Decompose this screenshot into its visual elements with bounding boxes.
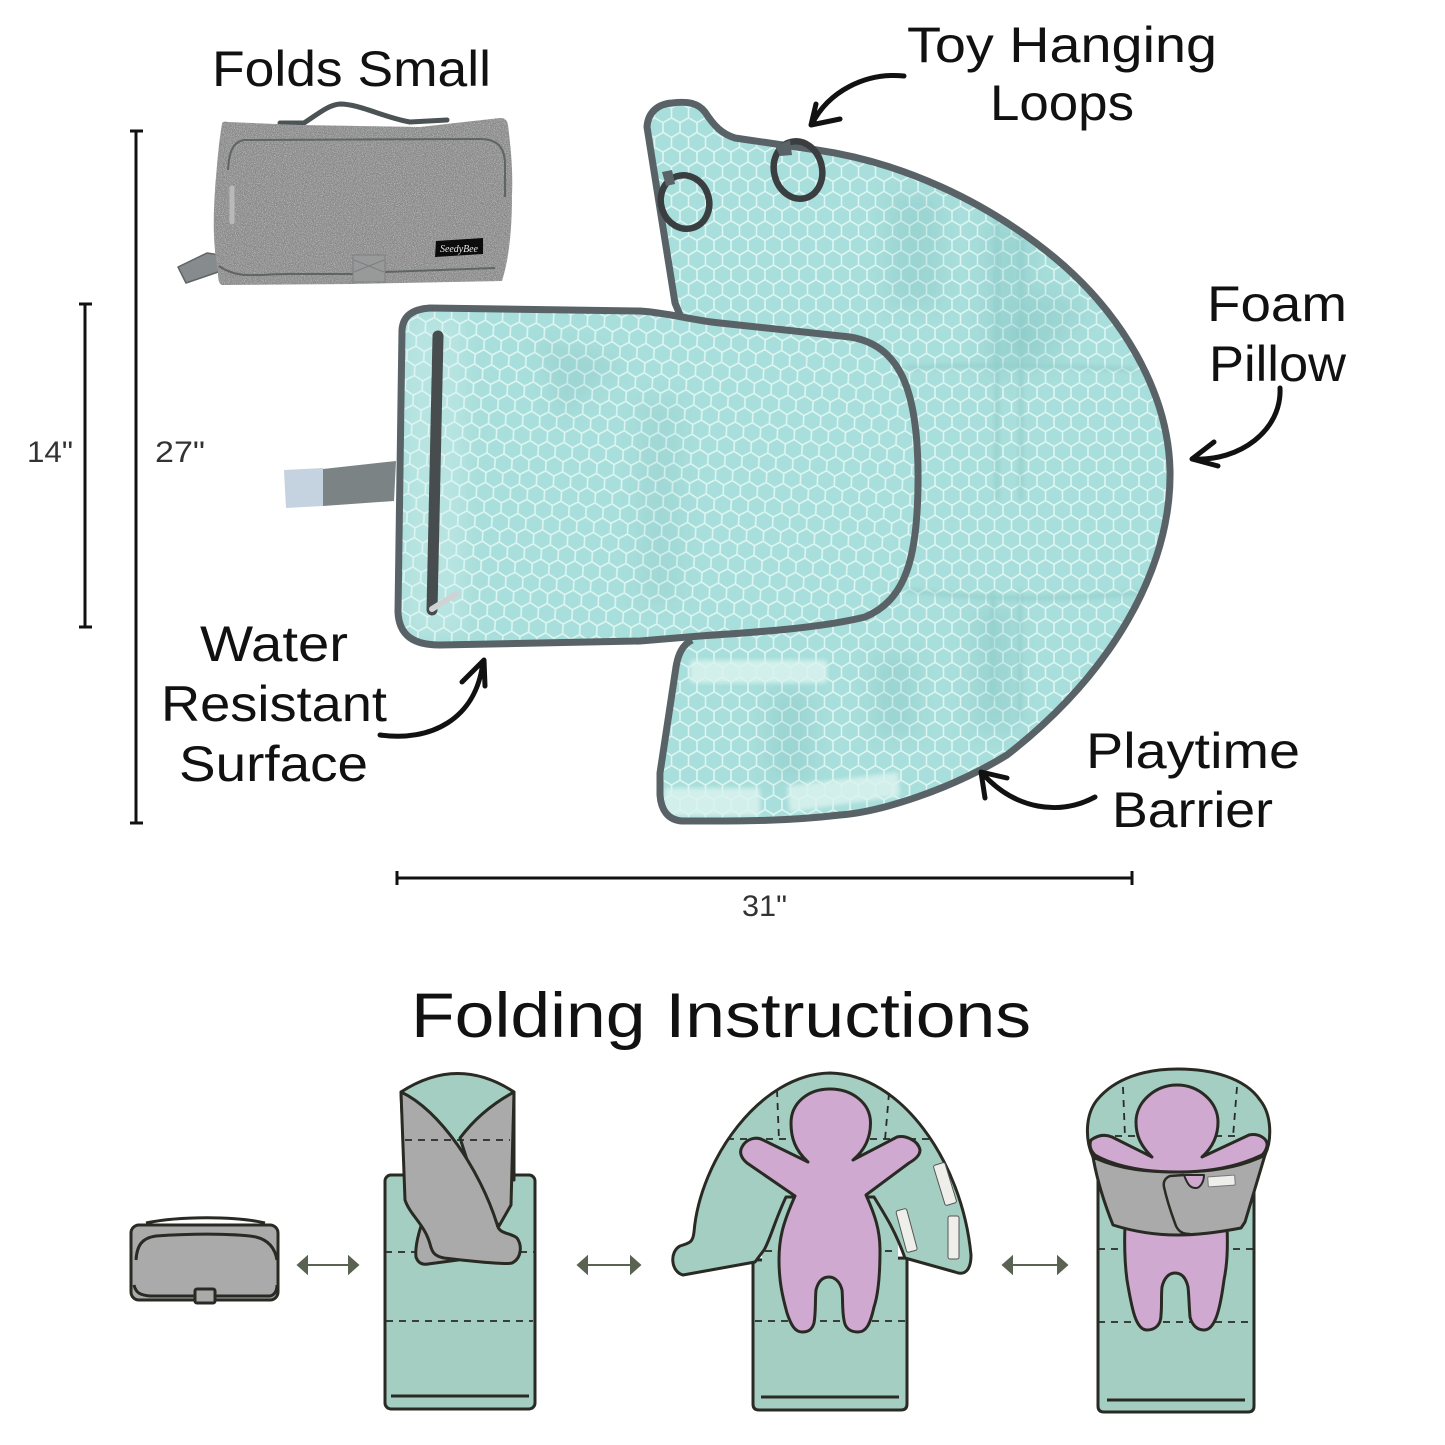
brand label: SeedyBee: [440, 244, 479, 255]
zipper pull: [230, 188, 234, 222]
mat zipper: [432, 336, 456, 610]
dimension line: 27 inch height: [130, 131, 143, 823]
label: Water Resistant Surface: Water: [200, 616, 348, 672]
top cap: [401, 1074, 514, 1180]
mat strap with fastener: [284, 461, 396, 508]
velcro strips: [896, 1162, 959, 1259]
step 4: wings wrapped over figure diagram: [1087, 1069, 1270, 1412]
crescent wings: [673, 1073, 971, 1275]
velcro strip: [1208, 1175, 1235, 1187]
arrow to toy loops: [811, 75, 904, 125]
bag handle: [280, 104, 447, 123]
label: Playtime Barrier: Barrier: [1112, 782, 1273, 838]
figure upper body: [1090, 1085, 1267, 1172]
right wing: [460, 1092, 514, 1226]
dimension label: 31 inch: 31": [742, 890, 787, 923]
base panel: [385, 1175, 535, 1409]
fold lines: [1098, 1087, 1253, 1322]
fold lines: [727, 1090, 933, 1321]
arrow to playtime barrier: [981, 772, 1095, 808]
mat water resistant tongue panel: [398, 308, 918, 645]
dimension label: 27 inch: 27": [155, 436, 205, 469]
fold shadows: [770, 195, 1086, 780]
label: Toy Hanging Loops: Toy Hanging: [907, 17, 1217, 73]
brand label: [435, 238, 483, 257]
mat crescent pillow panel: [647, 102, 1170, 821]
figure legs: [1125, 1225, 1227, 1330]
base panel: [753, 1258, 907, 1410]
front tab: [353, 255, 385, 282]
label: Playtime Barrier: Playtime: [1086, 723, 1300, 779]
label: Playtime Barrier: [1086, 723, 1300, 838]
label: Water Resistant Surface: [161, 616, 387, 792]
toy ring two: [654, 169, 716, 235]
bottom bar: [1107, 1398, 1245, 1402]
fold lines: [385, 1140, 535, 1321]
label: Toy Hanging Loops: Loops: [990, 75, 1134, 131]
arrow to foam pillow: [1192, 388, 1280, 466]
figure: [741, 1089, 920, 1332]
heading: Folding Instructions: Folding Instructions: [411, 981, 1031, 1051]
bag pocket zipper: [219, 139, 505, 275]
grey wrap band: [1093, 1155, 1265, 1235]
base panel: [1098, 1180, 1254, 1412]
grey flap edge: [1164, 1175, 1190, 1234]
label: Foam Pillow: Foam: [1207, 276, 1347, 332]
double arrow 1: [298, 1257, 358, 1273]
lower back lobe: [416, 1223, 458, 1264]
label: Foam Pillow: Pillow: [1209, 336, 1347, 392]
heading: Folds Small: Folds Small: [212, 41, 491, 97]
seam creases: [905, 215, 1140, 720]
photo: unfolded changing mat: [284, 102, 1170, 821]
dimension line: 14 inch height: [79, 304, 92, 627]
bag side strap: [178, 253, 224, 283]
bag body: [214, 118, 512, 285]
head cap: [1087, 1069, 1270, 1157]
label: Foam Pillow: [1207, 276, 1347, 392]
label: Water Resistant Surface: Surface: [179, 736, 368, 792]
label: Water Resistant Surface: Resistant: [161, 676, 387, 732]
photo: folded grey bag: [178, 104, 512, 285]
label: Toy Hanging Loops: [907, 17, 1217, 131]
double arrow 3: [1003, 1257, 1067, 1273]
front wing: [401, 1092, 520, 1263]
step 1: folded bag icon: [131, 1218, 278, 1303]
step 3: open mat with figure diagram: [673, 1073, 971, 1410]
toy ring one: [768, 136, 828, 204]
step 2: folded wings diagram: [385, 1074, 535, 1409]
bottom bar: [391, 1394, 529, 1398]
velcro patches: [664, 660, 900, 816]
arrow to water resistant surface: [380, 660, 485, 736]
purple bump: [1184, 1175, 1204, 1188]
double arrow 2: [578, 1257, 640, 1273]
dimension line: 31 inch width: [397, 871, 1132, 885]
bottom bar: [761, 1396, 899, 1398]
dimension label: 14 inch: 14": [27, 436, 73, 469]
